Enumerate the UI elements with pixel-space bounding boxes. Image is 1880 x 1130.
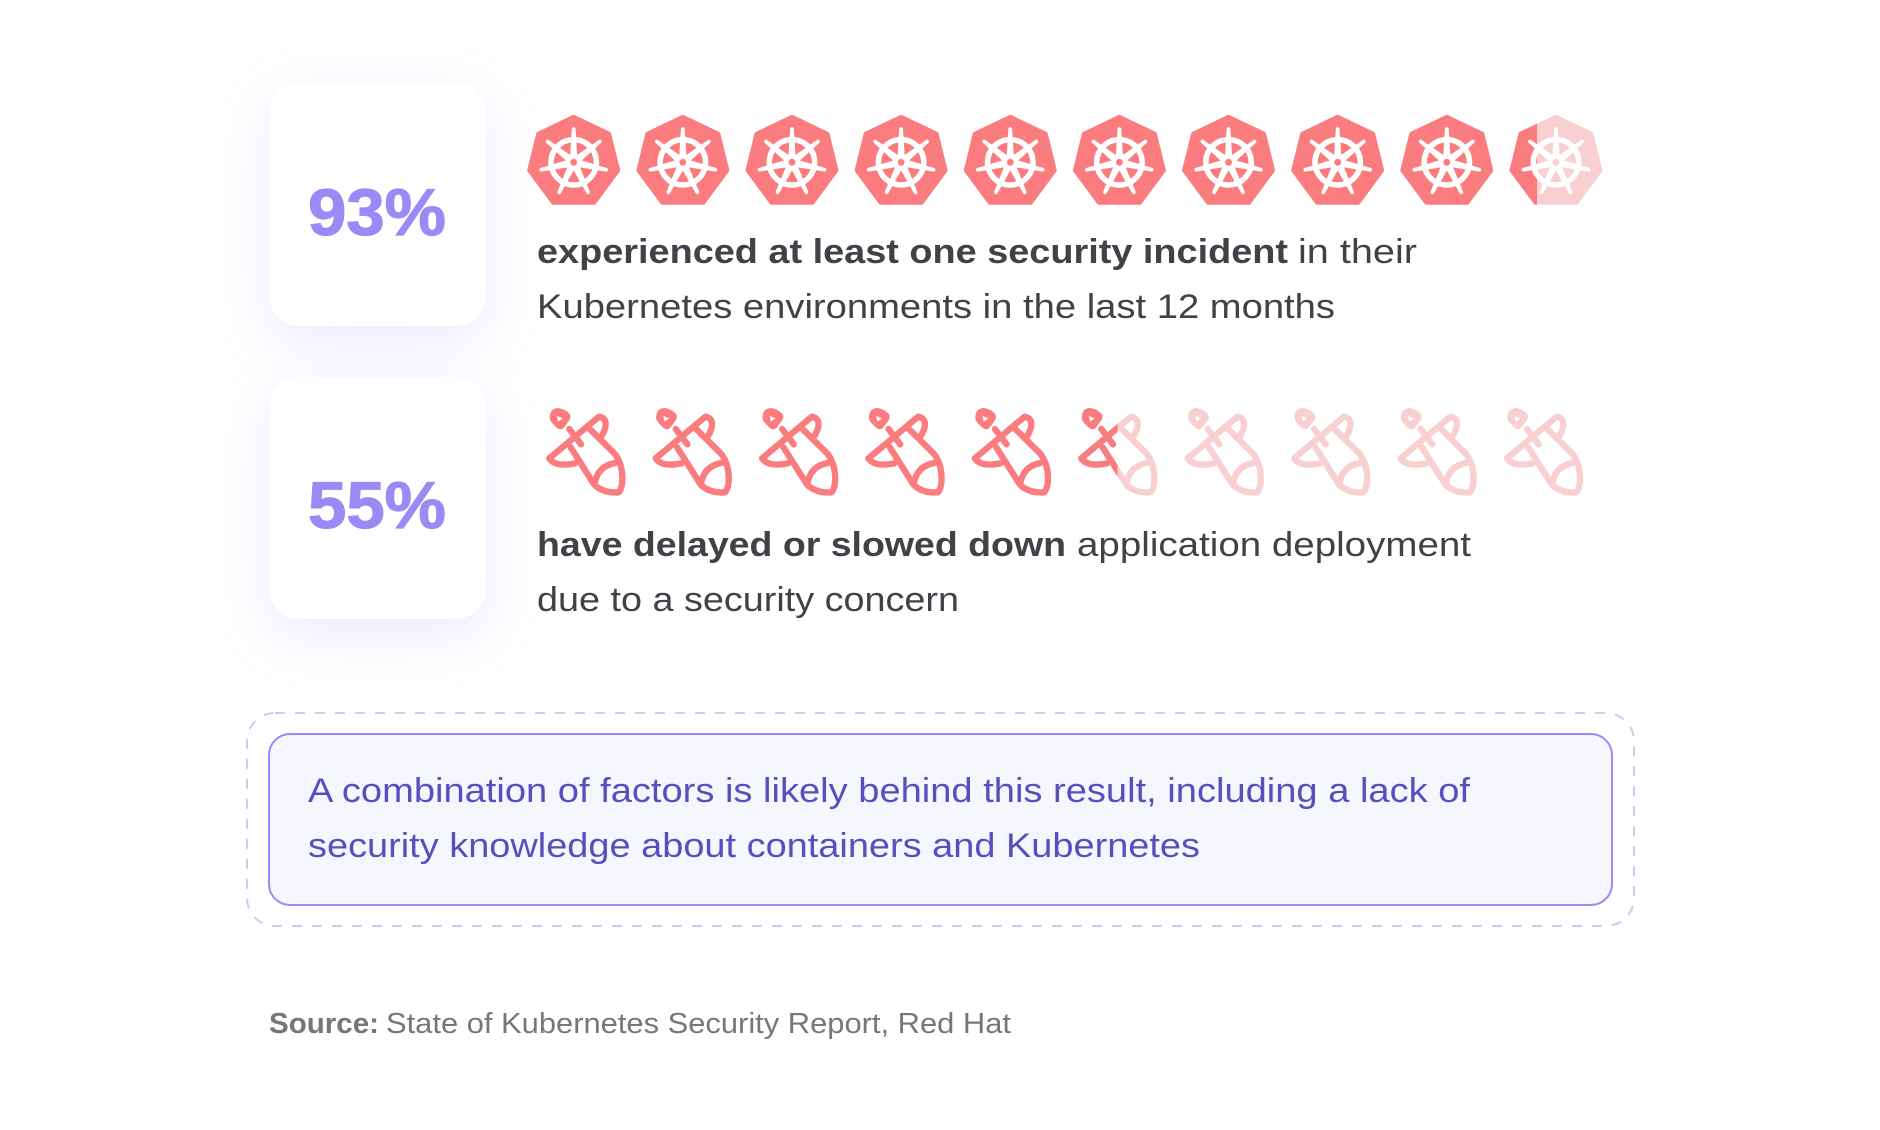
source line: Source: bbox=[269, 1008, 379, 1040]
text: 93% description bbox=[537, 233, 1417, 326]
text: 93% description: Kubernetes environments in the last 12 months bbox=[537, 288, 1335, 326]
text: 93% description: in their bbox=[1298, 233, 1417, 271]
callout text: A combination of factors is likely behind this result, including a lack of bbox=[308, 772, 1471, 810]
text: 55% description: due to a security concern bbox=[537, 581, 959, 619]
text: 55% description bbox=[537, 526, 1472, 619]
callout text bbox=[308, 772, 1471, 865]
source line: State of Kubernetes Security Report, Red Hat bbox=[386, 1008, 1011, 1040]
text: 93% description: experienced at least one security incident bbox=[537, 233, 1288, 271]
text: 55% description: application deployment bbox=[1077, 526, 1472, 564]
text: 55% description: have delayed or slowed down bbox=[537, 526, 1066, 564]
callout text: security knowledge about containers and Kubernetes bbox=[308, 827, 1200, 865]
panel: 55% stat card bbox=[269, 377, 486, 619]
icon row: ten rocket icons, 55% filled bbox=[549, 408, 1580, 492]
icon row: ten Kubernetes helm icons, 93% filled bbox=[529, 117, 1601, 203]
callout: dashed outer frame with combination-of-factors note bbox=[247, 713, 1634, 926]
stat: 93%: 93% bbox=[308, 175, 446, 249]
stat: 55%: 55% bbox=[308, 468, 446, 542]
panel: 93% stat card bbox=[269, 82, 486, 326]
